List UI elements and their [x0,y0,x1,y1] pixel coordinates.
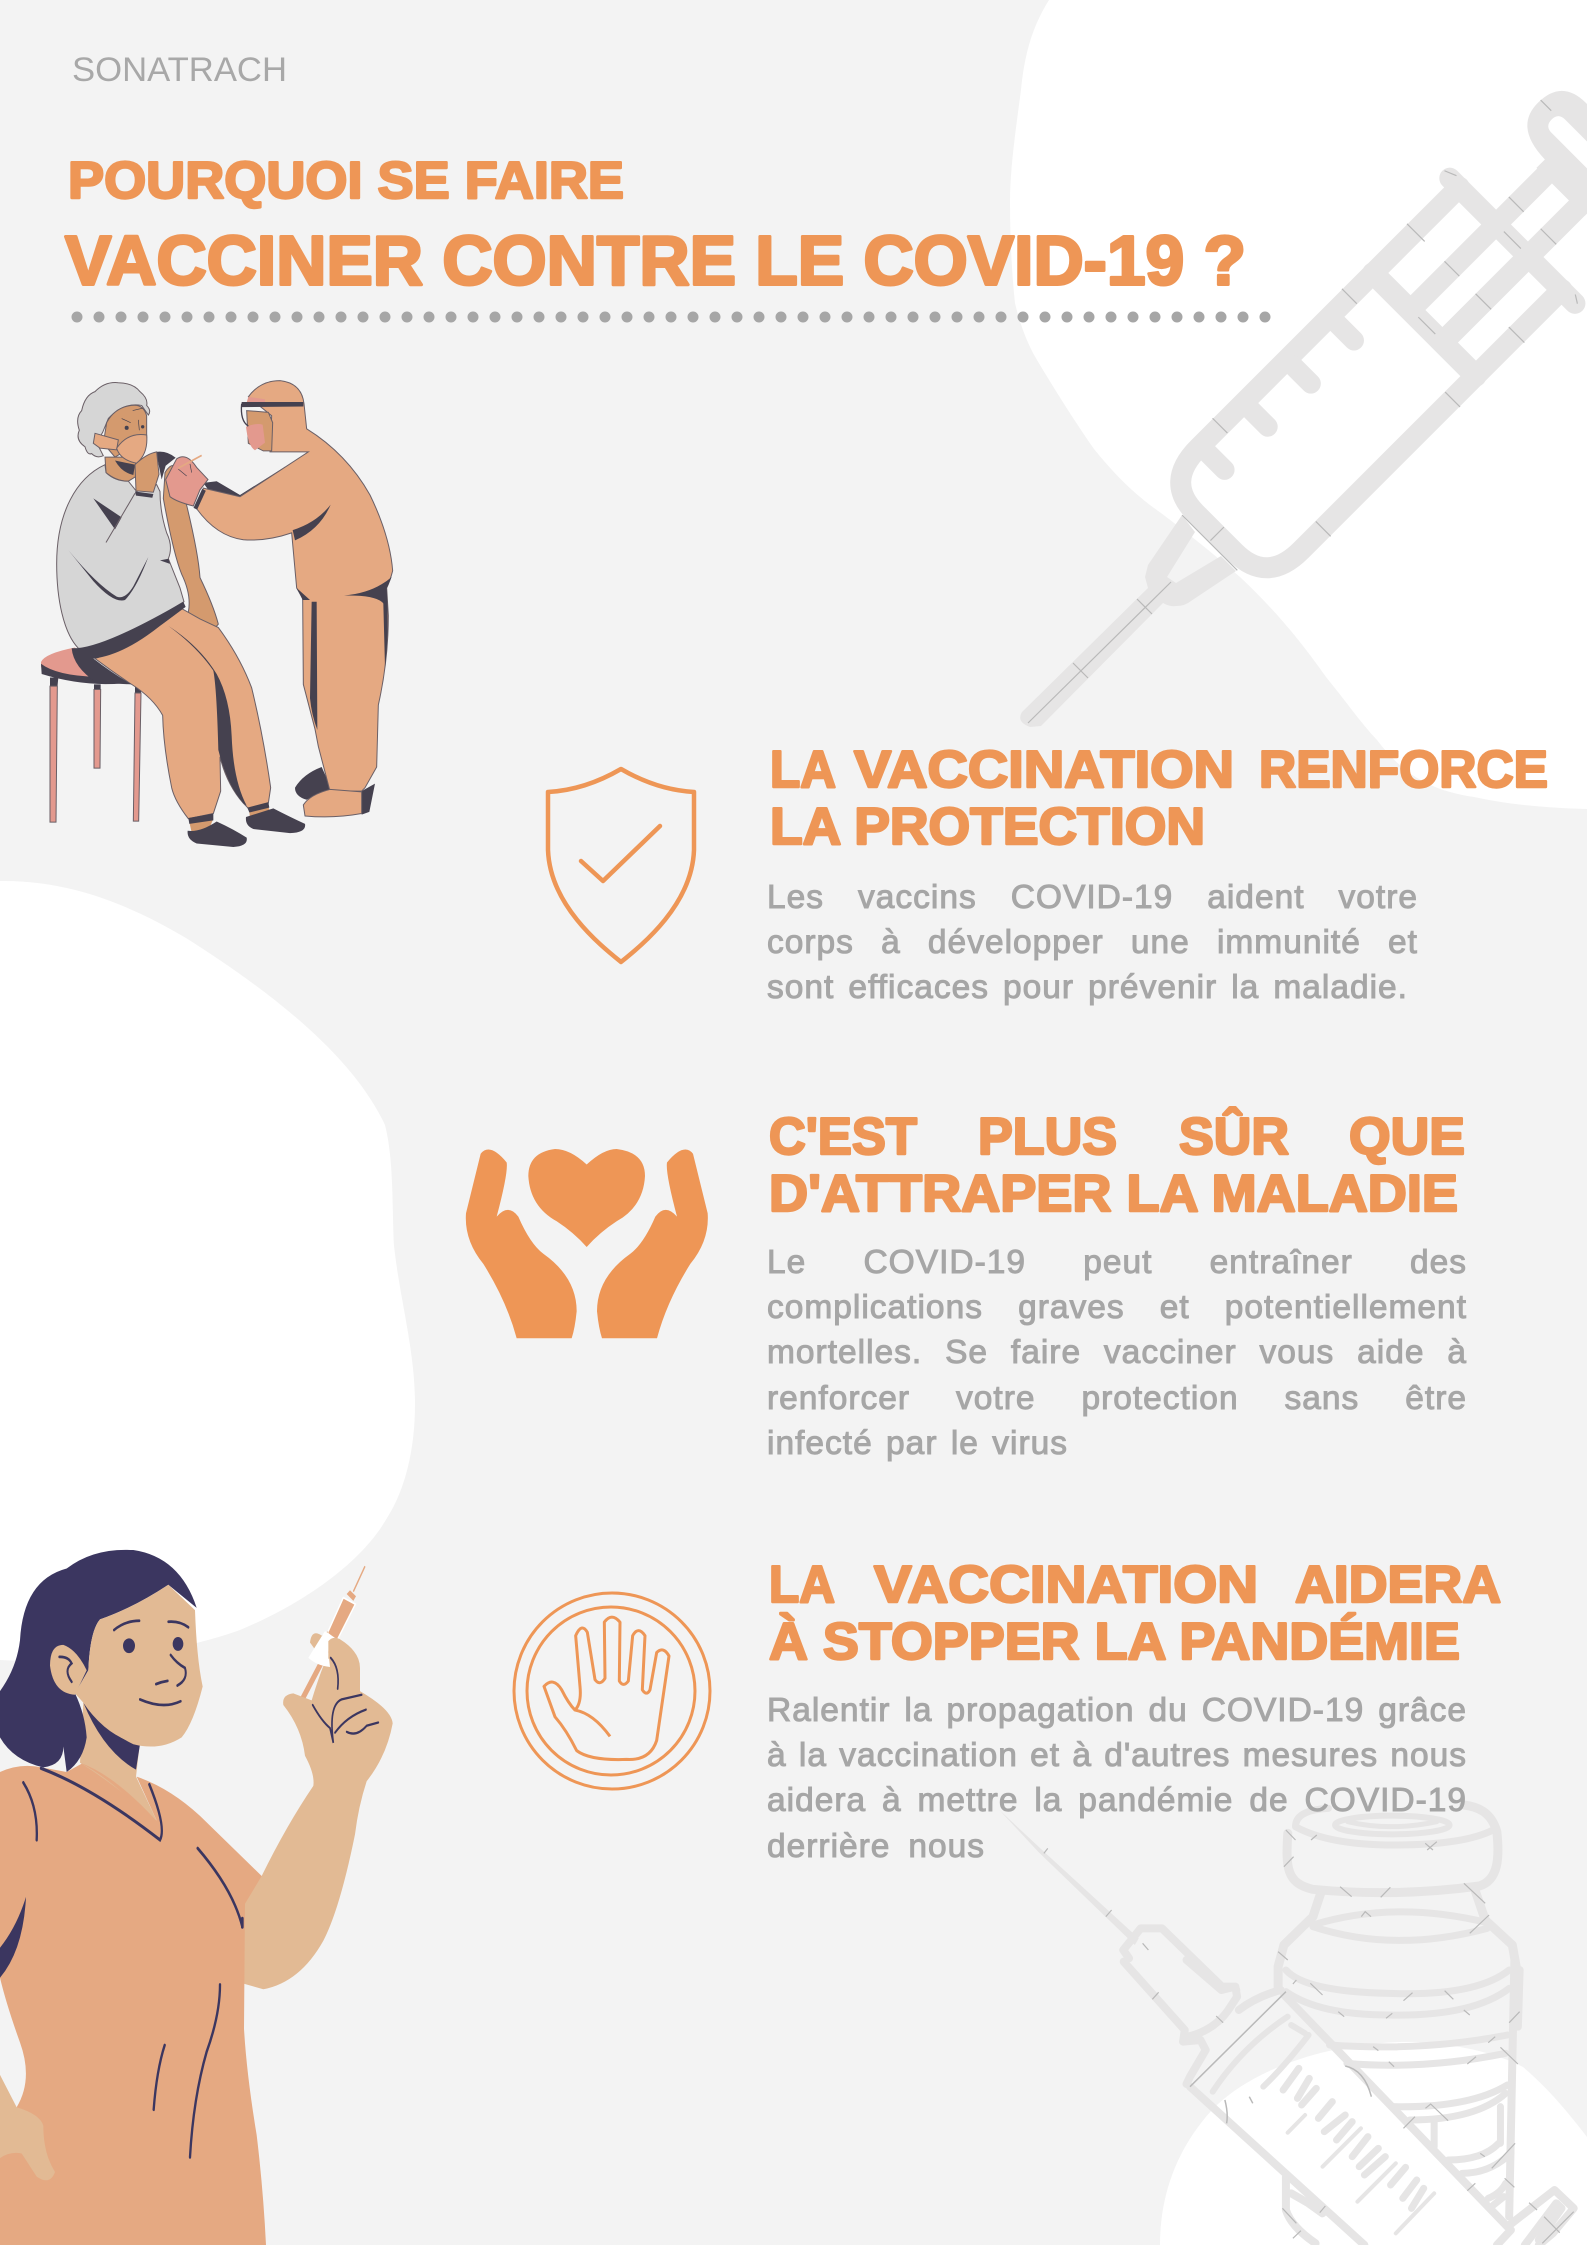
dress [0,1763,266,2245]
heading: c'est plus sûr que d'attraper la maladie: C'EST [769,1108,917,1166]
syringe in hand [302,1566,365,1700]
background blob: left [0,881,415,1661]
left hand on hip [0,2075,55,2180]
text block: plus sûr: complications graves et potentiellement [767,1289,1467,1326]
stool [41,648,141,822]
heading: c'est plus sûr que d'attraper la maladie: SÛR [1179,1107,1289,1166]
title line 1: POURQUOI SE FAIRE [68,152,624,210]
illustration: nurse vaccinating seated elderly woman [41,381,393,847]
text block: stopper la pandémie: aidera à mettre la pandémie de COVID-19 [767,1782,1467,1819]
heading: c'est plus sûr que d'attraper la maladie [769,1107,1465,1223]
text block: stopper la pandémie [767,1692,1467,1865]
icon: hands holding heart [466,1149,708,1338]
text block: stopper la pandémie: derrière nous [767,1828,985,1865]
hand-held arm [244,1631,393,1989]
background blob: top right [1010,0,1587,809]
facial features [59,1621,188,1705]
heading: la vaccination renforce la protection: LA PROTECTION [770,798,1205,856]
text block: plus sûr: infecté par le virus [767,1425,1068,1462]
text block: plus sûr: Le COVID-19 peut entraîner des [767,1244,1467,1281]
text block: stopper la pandémie: Ralentir la propagation du COVID-19 grâce [767,1692,1467,1729]
icon: vial and syringe bottom right [999,1805,1574,2245]
text block: protection: corps à développer une immunité et [767,924,1418,961]
illustration: nurse holding a syringe [0,1550,393,2245]
text block: plus sûr: renforcer votre protection sans être [767,1380,1467,1417]
icon: large syringe top right [1020,66,1587,727]
heading: la vaccination renforce la protection: VACCINATION [854,741,1234,799]
icon: stop hand in circles [514,1593,710,1789]
text block: plus sûr [767,1244,1467,1462]
heading: la vaccination aidera à stopper la pandémie: À STOPPER LA PANDÉMIE [769,1613,1460,1671]
heading: c'est plus sûr que d'attraper la maladie: D'ATTRAPER LA MALADIE [769,1165,1458,1223]
heading: la vaccination aidera à stopper la pandémie [769,1556,1501,1671]
dotted divider [77,312,1272,322]
heading: la vaccination renforce la protection [770,741,1548,856]
heading: la vaccination aidera à stopper la pandémie: LA [769,1556,835,1614]
text block: protection: sont efficaces pour prévenir la maladie. [767,969,1408,1006]
neck [80,1703,157,1821]
heading: la vaccination renforce la protection: RENFORCE [1259,741,1548,799]
text block: protection [767,879,1418,1006]
heading: c'est plus sûr que d'attraper la maladie: QUE [1349,1108,1465,1166]
background blob: bottom right [1160,2042,1587,2245]
medic in protective suit [166,381,393,817]
icon: shield with check [548,769,694,962]
text block: protection: Les vaccins COVID-19 aident votre [767,879,1418,916]
vial lower section and syringe barrel [1124,1960,1574,2245]
seated woman [57,383,305,847]
heading: la vaccination renforce la protection: LA [770,741,836,799]
text block: stopper la pandémie: à la vaccination et à d'autres mesures nous [767,1737,1467,1774]
title line 2: VACCINER CONTRE LE COVID-19 ? [65,222,1246,300]
face [75,1585,203,1747]
heading: la vaccination aidera à stopper la pandémie: AIDERA [1295,1556,1501,1614]
text block: plus sûr: mortelles. Se faire vacciner vous aide à [767,1334,1467,1371]
brand name: SONATRACH [72,51,287,89]
dress lines [23,1768,242,2157]
heading: c'est plus sûr que d'attraper la maladie: PLUS [978,1108,1117,1166]
hair [0,1550,197,1772]
heading: la vaccination aidera à stopper la pandémie: VACCINATION [874,1556,1258,1614]
